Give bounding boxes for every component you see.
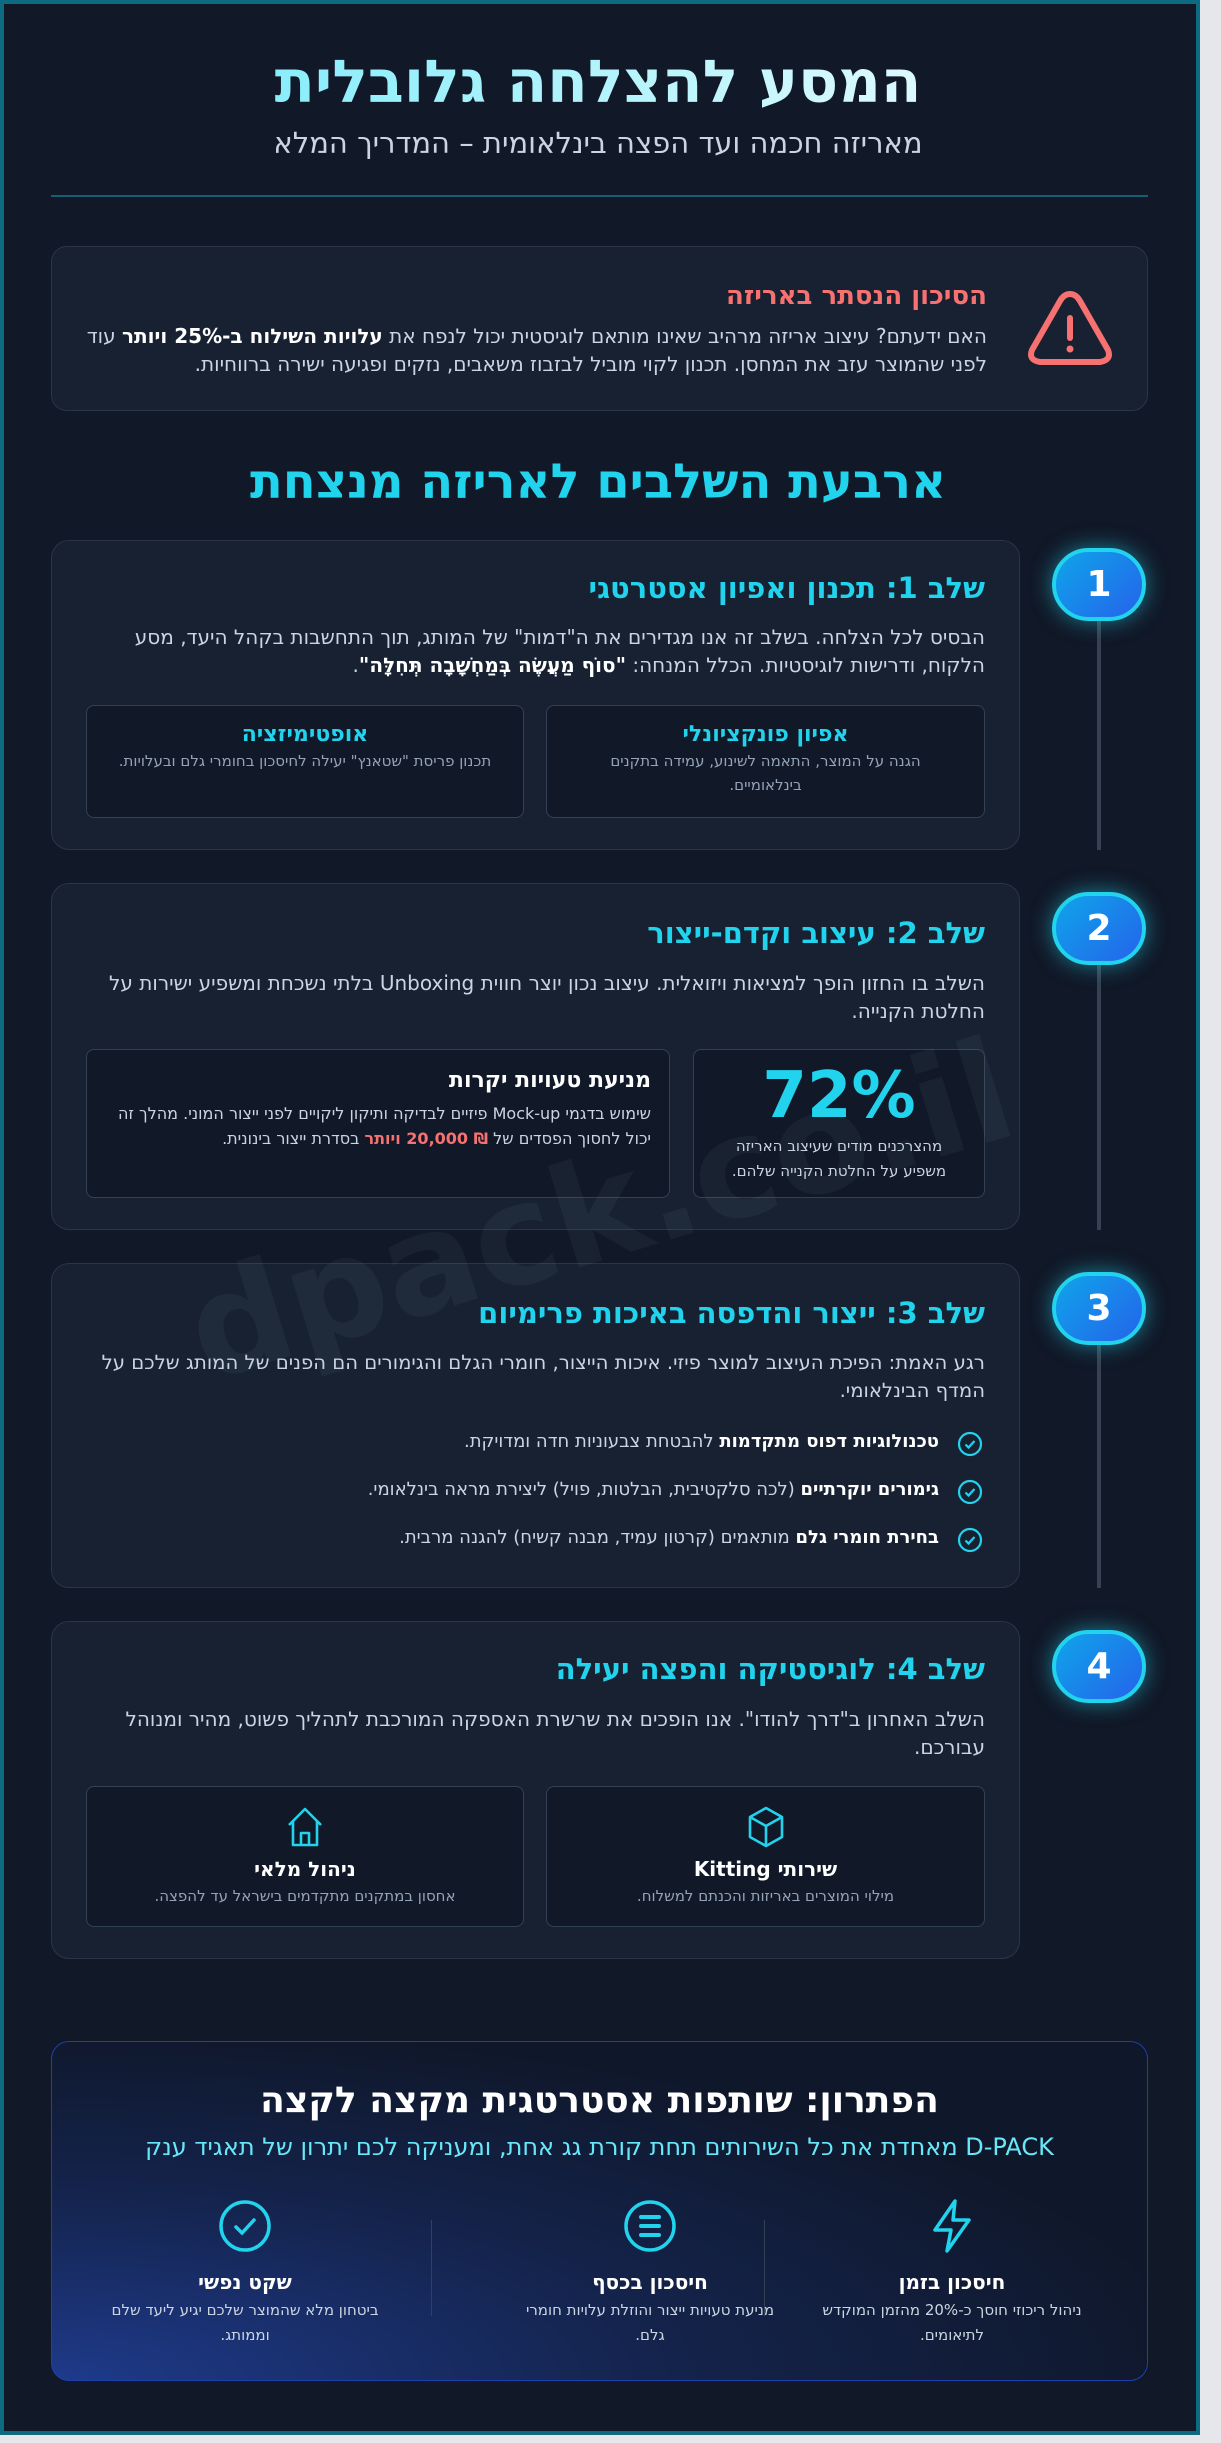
panel: step 1: [51, 540, 1020, 850]
title: [0, 42, 1196, 122]
benefit: peace of mind: שקט נפשי: [198, 2270, 292, 2294]
box: optimization: [86, 705, 524, 818]
benefit: money: חיסכון בכסף: [592, 2270, 708, 2294]
panel: step 1: שלב 1: תכנון ואפיון אסטרטגי: [589, 571, 985, 605]
box: kitting: [546, 1786, 985, 1927]
panel: step 4: השלב האחרון ב"דרך להודו". אנו הופכים את שרשרת האספקה המורכבת לתהליך פשוט, מהיר ומנוהל עבורכם.: [125, 1707, 985, 1759]
step circle 4: [1052, 1630, 1146, 1703]
box: full management: אחסון במתקנים מתקדמים בישראל עד להפצה.: [154, 1887, 456, 1905]
panel: solution: [51, 2041, 1148, 2381]
benefit: peace of mind: ביטחון מלא שהמוצר שלכם יגיע ליעד שלם וממותג.: [111, 2301, 379, 2344]
step circle 2: [1052, 892, 1146, 965]
icon: house: [288, 1808, 322, 1846]
step circle 3: 3: [1086, 1288, 1112, 1329]
timeline line 3: [1097, 1340, 1101, 1588]
box: prevent mistakes: שימוש בדגמי Mock-up פיזיים לבדיקה ותיקון ליקויים לפני ייצור המוני. מהלך זה יכול לחסוך הפסדים של ₪ 20,000 ויותר בסדרת ייצור בינונית.: [118, 1104, 651, 1148]
icon: check: [958, 1432, 982, 1456]
benefit: time: [822, 2199, 1082, 2344]
watermark: dpack.co.il: [169, 1009, 1031, 1414]
benefit: time: חיסכון בזמן: [899, 2270, 1005, 2294]
step circle 4: 4: [1086, 1646, 1112, 1687]
timeline line 2: [1097, 960, 1101, 1230]
bullet 2: גימורים יוקרתיים (לכה סלקטיבית, הבלטות, פויל) ליצירת מראה בינלאומי.: [368, 1479, 939, 1500]
box: kitting: שירותי Kitting: [694, 1857, 837, 1881]
panel: step 2: שלב 2: עיצוב וקדם-ייצור: [647, 916, 985, 950]
heading: הפתרון: שותפות אסטרטגית מקצה לקצה: [260, 2080, 939, 2121]
subheading: D-PACK מאחדת את כל השירותים תחת קורת גג אחת, ומעניקה לכם יתרון של תאגיד ענק: [145, 2133, 1054, 2161]
stat box 72%: [693, 1049, 985, 1198]
panel: step 2: [51, 883, 1020, 1230]
step circle 3: [1052, 1272, 1146, 1345]
panel: step 4: שלב 4: לוגיסטיקה והפצה יעילה: [556, 1652, 985, 1686]
panel: step 1: הבסיס לכל הצלחה. בשלב זה אנו מגדירים את ה"דמות" של המותג, תוך התחשבות בקהל היעד, מסע הלקוח, ודרישות לוגיסטיות. הכלל המנחה: "סוֹף מַעֲשֶׂה בְּמַחְשָׁבָה תְּחִלָּה".: [135, 625, 985, 677]
bullet 1: טכנולוגיות דפוס מתקדמות להבטחת צבעוניות חדה ומדויקת.: [464, 1431, 939, 1452]
step circle 1: 1: [1086, 564, 1112, 605]
title: המסע להצלחה גלובלית: [275, 47, 921, 116]
panel: step 3: רגע האמת: הפיכת העיצוב למוצר פיזי. איכות הייצור, חומרי הגלם והגימורים הם הפנים של המותג שלכם על המדף הבינלאומי.: [102, 1351, 985, 1402]
box: full management: [86, 1786, 524, 1927]
text: האם ידעתם? עיצוב אריזה מרהיב שאינו מותאם לוגיסטית יכול לנפח את עלויות השילוח ב-25% ויותר עוד לפני שהמוצר עזב את המחסן. תכנון לקוי מוביל לבזבוז משאבים, נזקים ופגיעה ישירה ברווחיות.: [87, 324, 987, 376]
heading: four steps: ארבעת השלבים לאריזה מנצחת: [250, 454, 946, 510]
panel: step 3: שלב 3: ייצור והדפסה באיכות פרימיום: [478, 1296, 985, 1330]
stat box 72%: 72%: [762, 1059, 916, 1133]
panel: hidden risk: [51, 246, 1148, 411]
benefit: money: [526, 2200, 774, 2344]
heading: הסיכון הנסתר באריזה: [726, 281, 987, 311]
subtitle: מאריזה חכמה ועד הפצה בינלאומית – המדריך המלא: [273, 126, 923, 160]
box: functional: אפיון פונקציונלי: [682, 722, 849, 747]
box: optimization: תכנון פריסת "שטאנץ" יעילה לחיסכון בחומרי גלם ובעלויות.: [119, 752, 491, 770]
step circle 2: 2: [1086, 908, 1112, 949]
bullet 3: בחירת חומרי גלם מותאמים (קרטון עמיד, מבנה קשיח) להגנה מרבית.: [399, 1527, 939, 1548]
box: kitting: מילוי המוצרים באריזות והכנתם למשלוח.: [637, 1887, 894, 1905]
box: prevent mistakes: [86, 1049, 670, 1198]
box: full management: ניהול מלאי: [254, 1857, 356, 1881]
benefit: peace of mind: [111, 2200, 379, 2344]
panel: step 2: השלב בו החזון הופך למציאות ויזואלית. עיצוב נכון יוצר חווית Unboxing בלתי נשכחת ומשפיע ישירות על החלטת הקנייה.: [109, 971, 985, 1023]
box: optimization: אופטימיזציה: [242, 722, 368, 747]
stat box 72%: מהצרכנים מודים שעיצוב האריזה משפיע על החלטת הקנייה שלהם.: [732, 1137, 946, 1180]
benefit: money: מניעת טעויות ייצור והוזלת עלויות חומרי גלם.: [526, 2301, 774, 2344]
panel: step 4: [51, 1621, 1020, 1959]
box: functional: הגנה על המוצר, התאמה לשינוע, עמידה בתקנים בינלאומיים.: [610, 752, 921, 794]
icon: check circle: [219, 2200, 271, 2252]
step circle 1: [1052, 548, 1146, 621]
timeline line 1: [1097, 616, 1101, 850]
benefit: time: ניהול ריכוזי חוסך כ-20% מהזמן המוקדש לתיאומים.: [822, 2301, 1082, 2344]
icon: lightning: [933, 2199, 971, 2253]
panel: step 3: [51, 1263, 1020, 1588]
icon: check: [958, 1528, 982, 1552]
box: prevent mistakes: מניעת טעויות יקרות: [449, 1068, 651, 1093]
icon: box: [748, 1806, 784, 1848]
icon: warning: [1028, 291, 1112, 365]
box: functional: [546, 705, 985, 818]
icon: check: [958, 1480, 982, 1504]
icon: coin: [624, 2200, 676, 2252]
